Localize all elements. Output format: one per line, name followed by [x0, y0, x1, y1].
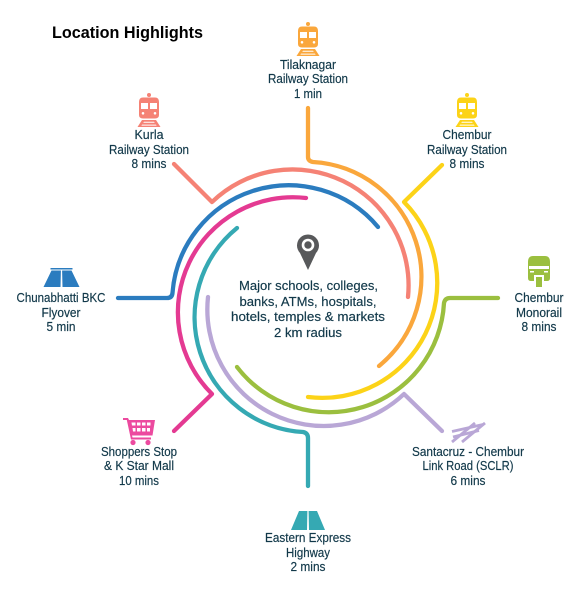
label: Railway Station — [427, 143, 507, 157]
label: Chunabhatti BKC — [16, 291, 106, 305]
station: Tilaknagar — [268, 22, 348, 101]
label: 8 mins — [522, 320, 556, 334]
route line: Chunabhatti — [118, 185, 378, 298]
icon: crossing roads — [452, 423, 485, 442]
label: 8 mins — [132, 157, 166, 171]
label: Kurla — [134, 128, 164, 142]
label: Tilaknagar — [280, 58, 336, 72]
label: Link Road (SCLR) — [422, 459, 514, 473]
label — [16, 291, 106, 334]
route line: Eastern Express Highway — [195, 228, 308, 486]
icon: shopping cart — [123, 418, 155, 445]
station: Chembur Railway — [427, 93, 507, 171]
label: Chembur — [514, 291, 564, 305]
icon: location pin — [297, 234, 319, 270]
center callout — [231, 234, 386, 340]
route line: Chembur Monorail — [237, 298, 498, 412]
route line: Chembur Railway — [308, 165, 442, 398]
label: Shoppers Stop — [101, 445, 177, 459]
label: 5 min — [46, 320, 76, 334]
center text: Major schools, colleges, — [239, 278, 378, 293]
label: Highway — [286, 546, 331, 560]
icon: highway — [291, 511, 325, 530]
route line: SCLR — [207, 297, 442, 431]
label: Eastern Express — [265, 531, 351, 545]
label: Monorail — [516, 306, 562, 320]
icon: flyover — [44, 268, 80, 287]
label: Flyover — [42, 306, 80, 320]
icon: monorail — [528, 256, 550, 287]
station: Eastern Express Highway — [265, 511, 351, 574]
icon: train yellow — [456, 93, 478, 127]
station: Chembur Monorail — [514, 256, 564, 334]
title: Location Highlights — [52, 24, 203, 42]
center text: hotels, temples & markets — [231, 309, 386, 324]
label — [101, 445, 177, 488]
label: Santacruz - Chembur — [412, 445, 524, 459]
center text — [231, 278, 386, 340]
route line: Kurla — [174, 164, 409, 297]
label — [412, 445, 524, 488]
label — [109, 128, 189, 171]
station: Santacruz - Chembur Link Road — [412, 423, 524, 488]
label: 6 mins — [450, 474, 486, 488]
label — [514, 291, 564, 334]
label — [427, 128, 507, 171]
station: Chunabhatti BKC Flyover — [16, 268, 106, 334]
route line: Tilaknagar — [308, 108, 421, 366]
label — [265, 531, 351, 574]
station: Shoppers Stop — [101, 418, 177, 488]
route line: Shoppers Stop — [174, 197, 306, 431]
icon: train orange — [296, 22, 320, 56]
label — [268, 58, 348, 101]
label: 2 mins — [290, 560, 326, 574]
center text: 2 km radius — [274, 325, 342, 340]
center text: banks, ATMs, hospitals, — [240, 294, 376, 309]
icon: train salmon — [138, 93, 160, 127]
label: 8 mins — [450, 157, 484, 171]
label: 1 min — [294, 87, 322, 101]
label: 10 mins — [119, 474, 159, 488]
label: & K Star Mall — [104, 459, 174, 473]
station: Kurla — [109, 93, 189, 171]
label: Chembur — [442, 128, 492, 142]
label: Railway Station — [268, 72, 348, 86]
label: Railway Station — [109, 143, 189, 157]
